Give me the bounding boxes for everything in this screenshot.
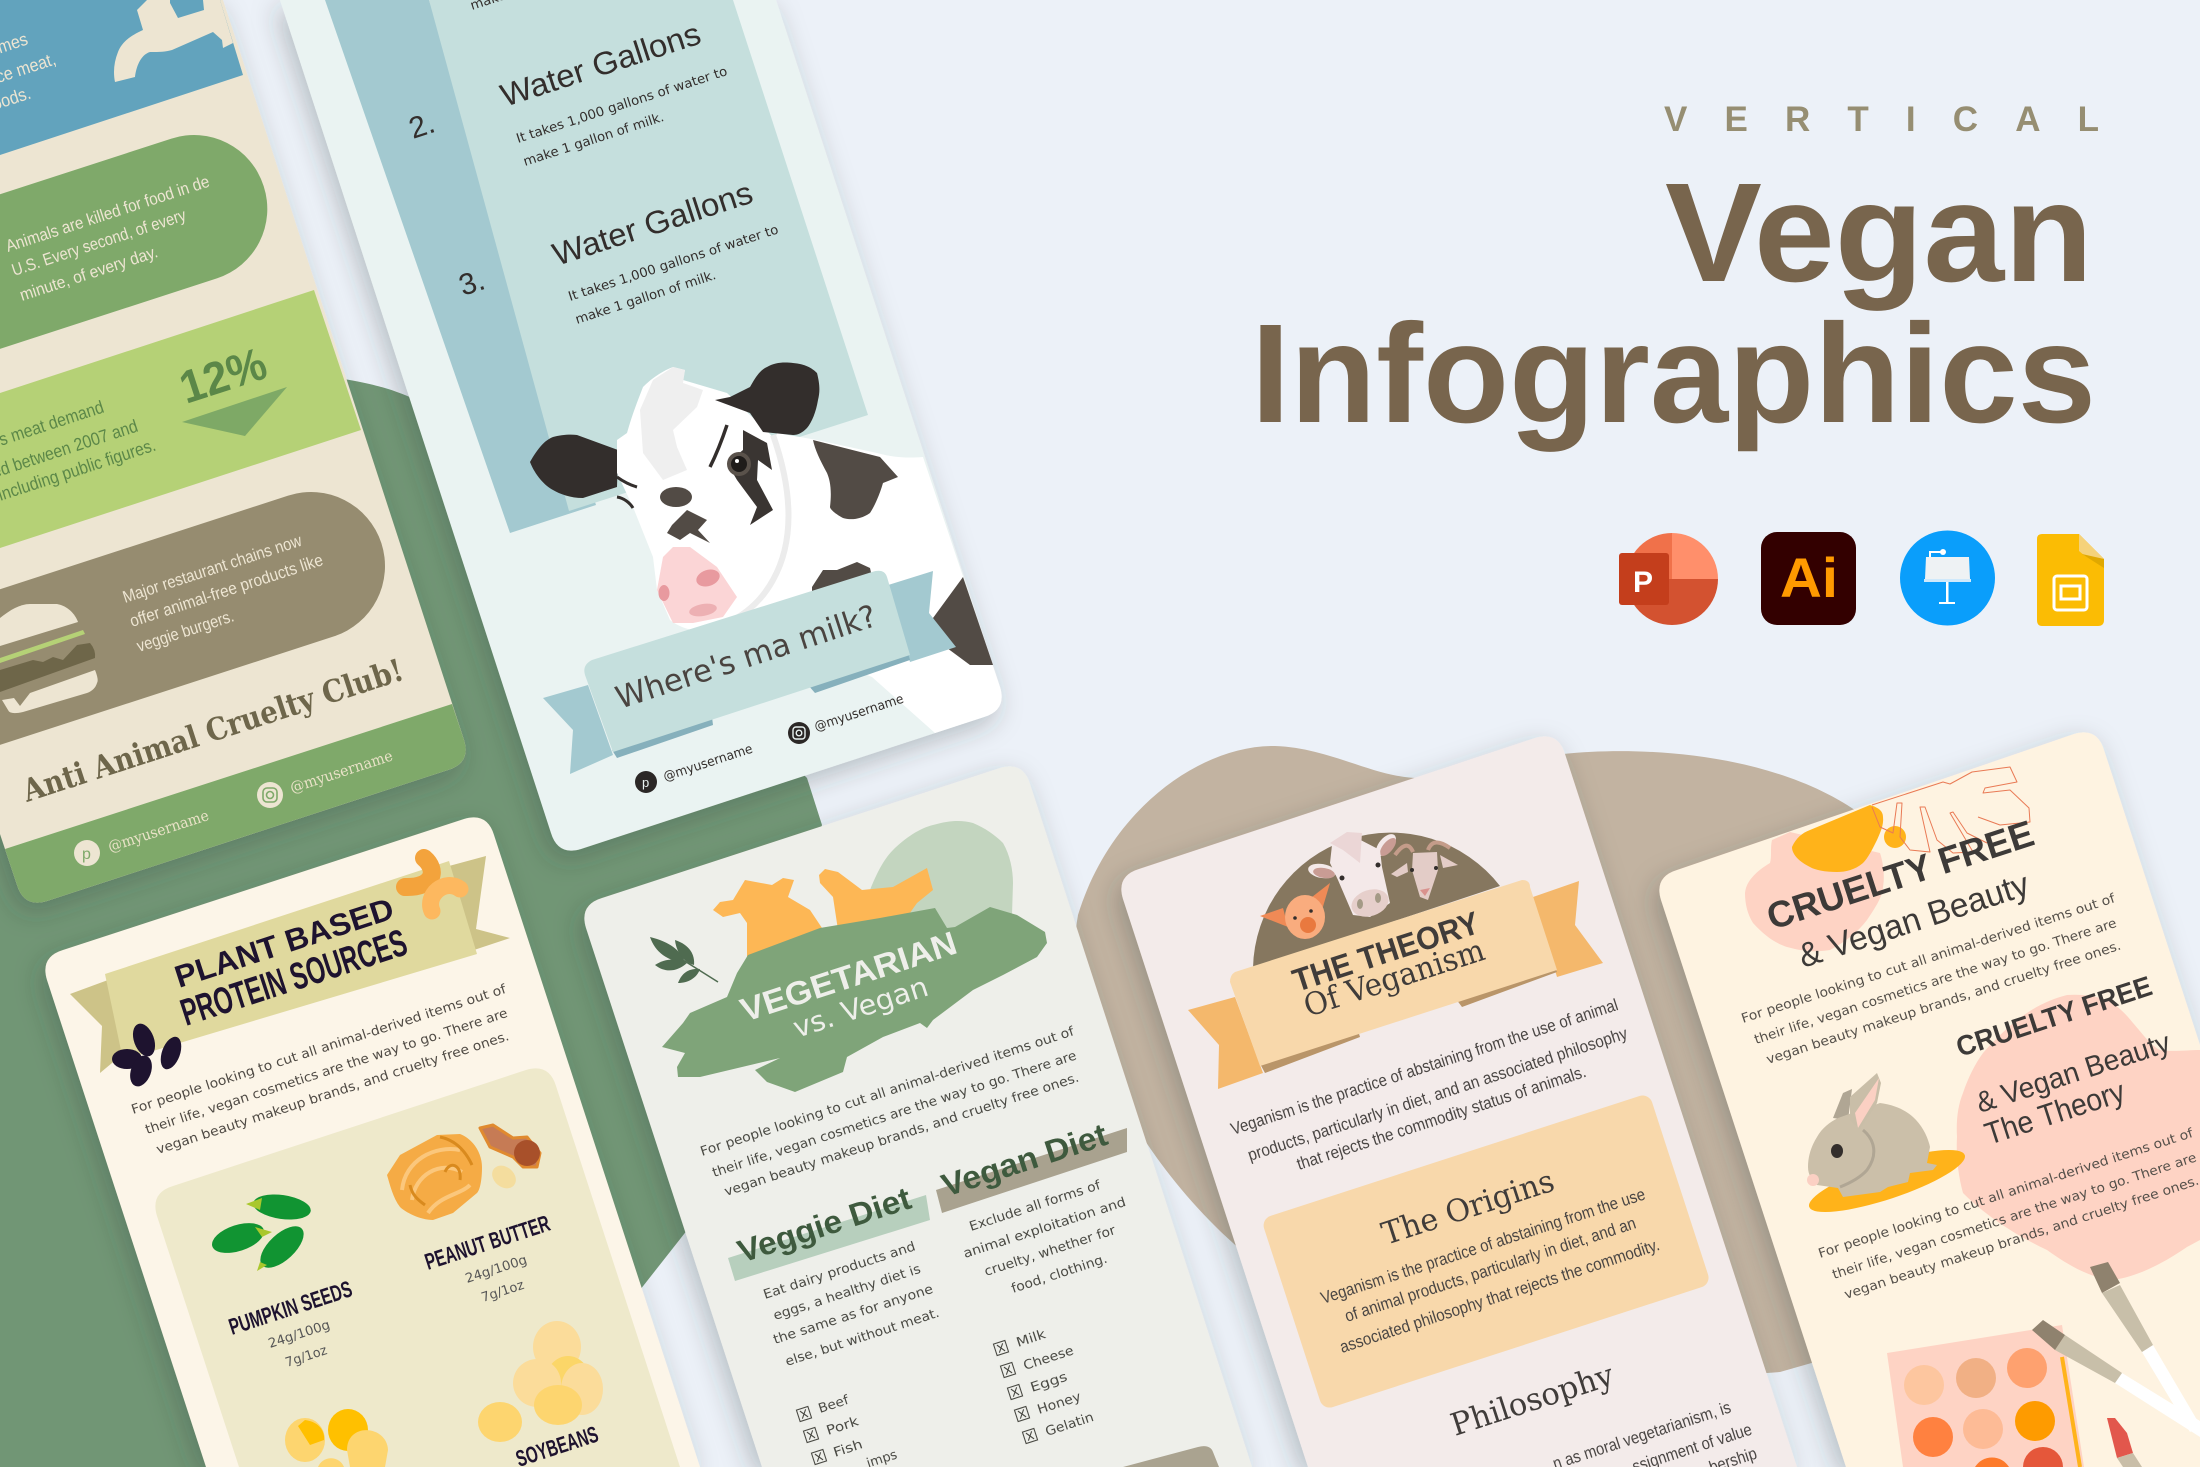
footer socials: @myusername — [662, 742, 755, 785]
veggie exclude list — [796, 1393, 899, 1467]
vegan exclude list — [993, 1327, 1096, 1444]
icon: soybeans — [478, 1321, 603, 1442]
intro text — [699, 1024, 1081, 1200]
icon: hen silhouette — [819, 868, 933, 930]
intro text — [130, 982, 511, 1158]
brown pill — [0, 473, 404, 791]
icon: cashews — [405, 858, 460, 911]
panel: where's ma milk card — [280, 0, 1002, 851]
veggie diet text: else, but without meat. — [784, 1306, 941, 1370]
pumpkin seeds label: 24g/100g — [267, 1318, 332, 1352]
pill text: offer animal-free products like — [127, 550, 325, 631]
numbered list: make 1 gallon of milk. — [522, 110, 666, 170]
illustration: cow — [530, 362, 1002, 733]
subtitle: & Vegan Beauty — [1794, 865, 2034, 976]
title: Anti Animal Cruelty Club! — [18, 652, 408, 810]
illustration: makeup brushes — [2032, 1262, 2200, 1437]
origins text: of animal products, particularly in diet, and an — [1342, 1213, 1638, 1326]
pink blob top — [1745, 832, 1884, 951]
pale blob — [870, 821, 1013, 935]
intro text: that rejects the commodity status of animals. — [1294, 1062, 1588, 1174]
pumpkin seeds label — [226, 1275, 355, 1371]
intro text: their life, vegan cosmetics are the way to go. There are — [144, 1006, 510, 1138]
pill text: U.S. Every second, of every — [9, 205, 189, 280]
background blob: tan — [1075, 746, 1900, 1400]
veggie diet text: Eat dairy products and — [762, 1239, 917, 1303]
footer socials: @myusername — [288, 747, 395, 797]
veggie exclude list: Beef — [817, 1393, 851, 1417]
numbered list — [405, 0, 781, 328]
footer band — [5, 704, 466, 903]
second paragraph: For people looking to cut all animal-derived items out of — [1817, 1126, 2195, 1262]
yellow dot — [1884, 826, 1906, 848]
vegan exclude list: Milk — [1015, 1327, 1048, 1351]
origins text: associated philosophy that rejects the commodity. — [1337, 1235, 1662, 1357]
intro text: For people looking to cut all animal-derived items out of — [1740, 891, 2117, 1027]
peanut butter label: 7g/1oz — [480, 1278, 526, 1306]
vegan exclude list: Honey — [1036, 1390, 1083, 1418]
peanut butter label: 24g/100g — [464, 1253, 529, 1287]
footer socials: p — [82, 846, 91, 863]
footer socials — [635, 692, 906, 793]
footer socials: @myusername — [106, 806, 211, 856]
icon: illustrator: Ai — [1780, 546, 1838, 609]
panel: plant based protein sources card — [45, 817, 700, 1467]
subtitle: PROTEIN SOURCES — [176, 922, 412, 1035]
third subtitle: The Theory — [1980, 1073, 2130, 1152]
panel: anti animal cruelty club card — [0, 0, 466, 903]
leaf outline — [1872, 767, 2030, 853]
vegan diet text: Exclude all forms of — [968, 1178, 1103, 1235]
numbered list: Water Gallons — [548, 174, 757, 273]
icon: google slides — [2037, 534, 2104, 626]
heading: vegan diet: Vegan Diet — [937, 1116, 1112, 1204]
numbered list: make 1 gallon of milk. — [574, 268, 718, 328]
green pill — [0, 116, 286, 402]
light green band — [0, 290, 361, 548]
title: vegan: Vegan — [1665, 153, 2093, 311]
ribbon banner — [70, 856, 510, 1073]
intro text: products, particularly in diet, and an associated philosophy — [1245, 1024, 1630, 1165]
icon: leaf branch — [650, 937, 718, 983]
origins box — [1261, 1093, 1711, 1410]
origins text — [1318, 1185, 1662, 1357]
second paragraph: their life, vegan cosmetics are the way to go. There are — [1831, 1150, 2199, 1283]
intro text: their life, vegan cosmetics are the way to go. There are — [1753, 916, 2119, 1048]
illustration: rabbit — [1804, 1073, 1970, 1224]
title: THE THEORY — [1288, 904, 1484, 999]
numbered list: Water Gallons — [496, 15, 705, 114]
vegan diet text: animal exploitation and — [962, 1195, 1128, 1262]
icon: down triangle — [182, 387, 287, 436]
icon: pumpkin seeds — [208, 1191, 312, 1275]
vegan diet text: cruelty, whether for — [983, 1223, 1118, 1280]
veggie exclude list: Fish — [832, 1437, 865, 1461]
vegan diet text — [962, 1178, 1128, 1297]
background blob: green — [0, 373, 822, 1467]
icon: powerpoint: P — [1633, 566, 1653, 599]
panel: theory of veganism card — [1121, 736, 1797, 1467]
intro text: vegan beauty makeup brands, and cruelty free ones. — [155, 1029, 511, 1158]
band text — [0, 397, 158, 508]
label: vertical: VERTICAL — [1664, 100, 2099, 139]
bottom box — [1123, 1446, 1219, 1467]
intro text: vegan beauty makeup brands, and cruelty free ones. — [723, 1071, 1081, 1200]
footer socials: @myusername — [813, 692, 906, 735]
pill text: minute, of every day. — [17, 242, 160, 305]
illustration: lipstick — [2107, 1418, 2142, 1467]
ribbon banner — [1188, 880, 1603, 1089]
icon: keynote — [1900, 530, 1995, 626]
veggie diet text — [762, 1239, 941, 1370]
intro text — [1740, 891, 2123, 1068]
pumpkin seeds label: 7g/1oz — [284, 1343, 329, 1371]
illustration: farm animals — [1260, 831, 1458, 939]
icon: illustrator — [1761, 532, 1856, 625]
title: VEGETARIAN — [736, 924, 961, 1029]
icon: powerpoint — [1619, 533, 1718, 625]
intro text: Veganism is the practice of abstaining from the use of animal — [1228, 995, 1620, 1139]
blue strip — [325, 0, 596, 533]
second title: CRUELTY FREE — [1952, 970, 2156, 1063]
heading: veggie diet: Veggie Diet — [733, 1180, 916, 1270]
footer socials: p — [642, 775, 649, 790]
intro text: For people looking to cut all animal-derived items out of — [699, 1024, 1076, 1160]
intro text: vegan beauty makeup brands, and cruelty free ones. — [1765, 939, 2123, 1068]
peanut butter label: PEANUT BUTTER — [422, 1210, 553, 1275]
peanut butter label — [422, 1210, 553, 1306]
vegan diet text: food, clothing. — [1010, 1252, 1109, 1297]
veggie exclude list: Pork — [825, 1414, 861, 1439]
illustration: eyeshadow palette — [1887, 1325, 2084, 1467]
pill text — [3, 172, 212, 305]
pink blob large — [1957, 995, 2200, 1280]
dome — [1253, 833, 1500, 968]
second paragraph: vegan beauty makeup brands, and cruelty free ones. — [1843, 1174, 2200, 1303]
numbered list: It takes 1,000 gallons of water to — [567, 223, 781, 305]
vegan exclude list: Cheese — [1022, 1343, 1076, 1374]
pill text — [120, 531, 325, 656]
intro text: For people looking to cut all animal-derived items out of — [130, 982, 508, 1118]
icon: peanut butter — [387, 1125, 540, 1220]
pill text: veggie burgers. — [134, 607, 236, 656]
numbered list: It takes 1,000 gallons of water to — [515, 64, 729, 147]
yellow blob — [1792, 805, 1883, 872]
icon: faucet — [114, 0, 233, 82]
icon: cow silhouette — [713, 878, 822, 970]
veggie diet text: the same as for anyone — [772, 1282, 935, 1348]
ribbon banner — [543, 571, 956, 774]
blue section — [0, 0, 243, 155]
origins heading: The Origins — [1377, 1163, 1559, 1253]
vegan exclude list: Gelatin — [1044, 1410, 1096, 1440]
panel: cruelty free card — [1659, 732, 2200, 1467]
pill text: Animals are killed for food in de — [3, 172, 212, 256]
light panel — [429, 0, 868, 511]
icon: burger — [0, 604, 98, 713]
subtitle: Of Veganism — [1299, 932, 1489, 1025]
subtitle: vs. Vegan — [789, 970, 932, 1045]
brush stroke — [662, 907, 1047, 1092]
icon: beans — [112, 1021, 185, 1089]
blue section text — [0, 29, 58, 114]
panel: vegetarian vs vegan card — [584, 766, 1252, 1467]
inner panel — [155, 1068, 680, 1467]
title: CRUELTY FREE — [1762, 813, 2039, 938]
numbered list: 2. — [405, 107, 439, 146]
vegan exclude list: Eggs — [1029, 1370, 1070, 1396]
intro text: their life, vegan cosmetics are the way to go. There are — [711, 1048, 1079, 1181]
philosophy heading: Philosophy — [1446, 1357, 1619, 1444]
pill text: Major restaurant chains now — [120, 531, 305, 607]
statistic: 12%: 12% — [173, 337, 273, 414]
banner text: Where's ma milk? — [611, 598, 881, 717]
veggie diet text: eggs, a healthy diet is — [772, 1262, 923, 1324]
title: infographics: Infographics — [1251, 294, 2096, 452]
origins text: Veganism is the practice of abstaining from the use — [1318, 1185, 1648, 1308]
second subtitle: & Vegan Beauty — [1972, 1027, 2175, 1120]
title: PLANT BASED — [170, 891, 398, 995]
second paragraph — [1817, 1126, 2200, 1303]
icon: corn — [285, 1409, 388, 1467]
numbered list: 3. — [455, 264, 489, 303]
footer socials — [74, 747, 395, 866]
pumpkin seeds label: PUMPKIN SEEDS — [226, 1275, 355, 1340]
